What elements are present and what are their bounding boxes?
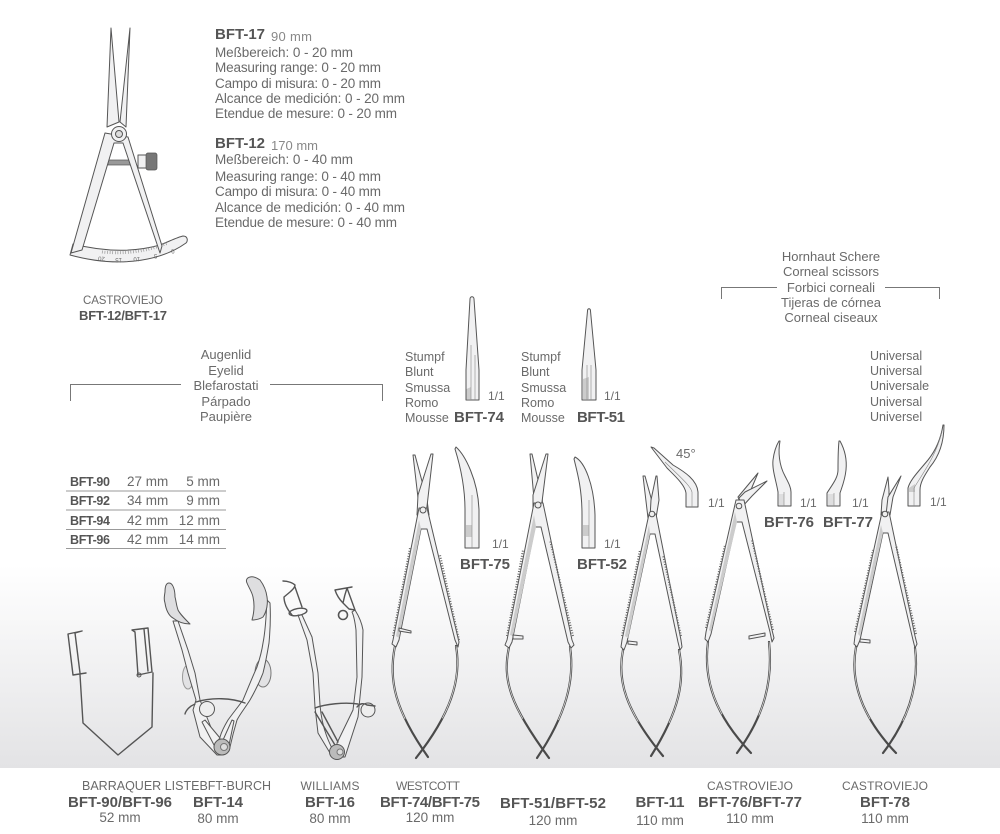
- icon: caliper BFT-12/BFT-17: 10: [133, 255, 140, 262]
- icon: caliper BFT-12/BFT-17: 15: [115, 256, 122, 262]
- text block: blunt BFT-74: BFT-74: [454, 409, 505, 426]
- icon: caliper BFT-12/BFT-17: 0: [170, 247, 175, 254]
- label: Castroviejo BFT-78: BFT-78: [860, 794, 910, 811]
- text block: blunt BFT-51: Smussa: [521, 381, 566, 395]
- icon: caliper BFT-12/BFT-17: 5: [153, 252, 158, 259]
- icon: curved tip BFT-52: 1/1: [604, 537, 621, 551]
- label: Castroviejo BFT-76/BFT-77: BFT-76/BFT-77: [698, 794, 802, 811]
- table: BFT-90 to BFT-96 sizes: 12 mm: [179, 513, 220, 528]
- table: BFT-90 to BFT-96 sizes: 14 mm: [179, 532, 220, 547]
- icon: curved tip BFT-52: [574, 457, 627, 573]
- text block: blunt BFT-74: Stumpf: [405, 350, 445, 364]
- label: Westcott: [380, 779, 480, 825]
- text block: universal: Universal: [870, 395, 922, 409]
- heading: eyelid specula: Blefarostati: [193, 378, 259, 393]
- icon: curved tip BFT-75: [455, 447, 510, 573]
- label: Castroviejo caliper: [79, 295, 167, 323]
- icon: Westcott scissors BFT-74/BFT-75: [392, 454, 459, 758]
- icon: tip BFT-77: [823, 441, 873, 531]
- icon: scissors BFT-11: [621, 476, 682, 756]
- heading: eyelid specula: [70, 347, 382, 424]
- icon: curved tip BFT-75: BFT-75: [460, 556, 510, 573]
- text block: universal: Universale: [870, 379, 929, 393]
- text block: BFT-17 specs: Alcance de medición: 0 - 20 mm: [215, 91, 405, 106]
- heading: corneal scissors: Hornhaut Schere: [782, 249, 880, 264]
- label: Castroviejo BFT-78: CASTROVIEJO: [842, 779, 928, 793]
- text block: universal: [870, 349, 929, 424]
- icon: tip BFT-76: BFT-76: [764, 514, 814, 531]
- text block: blunt BFT-74: Mousse: [405, 411, 449, 425]
- icon: universal tip: 1/1: [930, 495, 947, 509]
- text block: BFT-17 specs: 90 mm: [271, 29, 312, 44]
- heading: eyelid specula: Augenlid: [201, 347, 251, 362]
- label: BFT-11: BFT-11: [636, 794, 684, 811]
- text block: blunt BFT-74: 1/1: [488, 389, 505, 403]
- label: Westcott: WESTCOTT: [396, 779, 461, 793]
- icon: 45 degree tip BFT-11: 1/1: [708, 496, 725, 510]
- icon: curved tip BFT-75: 1/1: [492, 537, 509, 551]
- table: BFT-90 to BFT-96 sizes: 34 mm: [127, 493, 168, 508]
- icon: curved tip BFT-52: BFT-52: [577, 556, 627, 573]
- text block: BFT-12 specs: [215, 135, 405, 230]
- label: Westcott: 120 mm: [406, 810, 454, 825]
- label: Williams: WILLIAMS: [300, 779, 360, 793]
- table: BFT-90 to BFT-96 sizes: BFT-96: [70, 533, 110, 547]
- label: BFT-51/BFT-52: [500, 795, 606, 828]
- label: Barraquer / Lister-Burch: 80 mm: [197, 811, 239, 826]
- text block: universal: Universal: [870, 349, 922, 363]
- icon: tip BFT-77: BFT-77: [823, 514, 873, 531]
- text block: blunt BFT-51: Stumpf: [521, 350, 561, 364]
- icon: scissors BFT-76/BFT-77: [705, 473, 774, 753]
- label: Castroviejo BFT-76/BFT-77: [698, 779, 802, 826]
- heading: eyelid specula: Párpado: [201, 394, 251, 409]
- icon: tip BFT-76: [764, 441, 817, 531]
- text block: blunt BFT-51: BFT-51: [577, 409, 625, 426]
- text block: universal: Universal: [870, 364, 922, 378]
- text block: blunt BFT-51: 1/1: [604, 389, 621, 403]
- icon: scissors BFT-78: [854, 476, 917, 753]
- table: BFT-90 to BFT-96 sizes: 42 mm: [127, 513, 168, 528]
- icon: scissors BFT-51/BFT-52: [505, 454, 574, 758]
- icon: Barraquer speculum: [68, 628, 153, 755]
- table: BFT-90 to BFT-96 sizes: BFT-92: [70, 494, 110, 508]
- text block: blunt BFT-51: Mousse: [521, 411, 565, 425]
- table: BFT-90 to BFT-96 sizes: [66, 474, 226, 548]
- label: Barraquer / Lister-Burch: BFT-90/BFT-96: [68, 794, 172, 811]
- label: Barraquer / Lister-Burch: BARRAQUER LISTEBFT-BURCH: [82, 779, 271, 793]
- text block: BFT-17 specs: BFT-17: [215, 26, 265, 43]
- text block: BFT-17 specs: [215, 26, 405, 121]
- text block: blunt BFT-51: Blunt: [521, 365, 550, 379]
- text block: universal: Universel: [870, 410, 922, 424]
- label: Castroviejo BFT-78: [842, 779, 928, 826]
- text block: BFT-12 specs: BFT-12: [215, 135, 265, 152]
- label: Westcott: BFT-74/BFT-75: [380, 794, 480, 811]
- heading: corneal scissors: Tijeras de córnea: [781, 295, 882, 310]
- table: BFT-90 to BFT-96 sizes: 5 mm: [186, 474, 220, 489]
- text block: blunt BFT-74: Romo: [405, 396, 438, 410]
- icon: caliper BFT-12/BFT-17: 20: [97, 254, 105, 261]
- text block: blunt BFT-74: [405, 350, 505, 426]
- label: Castroviejo caliper: CASTROVIEJO: [83, 295, 163, 307]
- text block: BFT-12 specs: Meßbereich: 0 - 40 mm: [215, 152, 353, 167]
- table: BFT-90 to BFT-96 sizes: 27 mm: [127, 474, 168, 489]
- table: BFT-90 to BFT-96 sizes: 42 mm: [127, 532, 168, 547]
- heading: eyelid specula: Paupière: [200, 409, 252, 424]
- heading: corneal scissors: Corneal ciseaux: [784, 310, 878, 325]
- label: Castroviejo BFT-76/BFT-77: CASTROVIEJO: [707, 779, 793, 793]
- text block: BFT-17 specs: Etendue de mesure: 0 - 20 mm: [215, 106, 397, 121]
- text block: BFT-12 specs: Campo di misura: 0 - 40 mm: [215, 184, 381, 199]
- icon: 45 degree tip BFT-11: 45°: [676, 446, 696, 461]
- text block: blunt BFT-51: Romo: [521, 396, 554, 410]
- label: BFT-11: 110 mm: [636, 813, 684, 828]
- label: Barraquer / Lister-Burch: BFT-14: [193, 794, 244, 811]
- icon: tip BFT-77: 1/1: [852, 496, 869, 510]
- text block: blunt BFT-74: Blunt: [405, 365, 434, 379]
- icon: tip BFT-76: 1/1: [800, 496, 817, 510]
- label: BFT-11: [636, 794, 684, 828]
- heading: eyelid specula: Eyelid: [208, 363, 244, 378]
- label: BFT-51/BFT-52: 120 mm: [529, 813, 577, 828]
- text block: BFT-12 specs: Alcance de medición: 0 - 40 mm: [215, 200, 405, 215]
- text block: BFT-17 specs: Meßbereich: 0 - 20 mm: [215, 45, 353, 60]
- text block: BFT-12 specs: Etendue de mesure: 0 - 40 mm: [215, 215, 397, 230]
- text block: blunt BFT-51: [521, 350, 625, 426]
- label: Williams: [300, 779, 360, 826]
- icon: 45 degree tip BFT-11: [651, 446, 725, 510]
- text block: BFT-17 specs: Measuring range: 0 - 20 mm: [215, 60, 381, 75]
- icon: Williams speculum: [283, 581, 375, 760]
- icon: blade tip BFT-74: [466, 297, 479, 400]
- table: BFT-90 to BFT-96 sizes: BFT-94: [70, 514, 110, 528]
- label: Barraquer / Lister-Burch: [68, 779, 271, 826]
- label: Castroviejo BFT-78: 110 mm: [861, 811, 909, 826]
- icon: Lister-Burch speculum: [164, 577, 271, 755]
- label: BFT-51/BFT-52: BFT-51/BFT-52: [500, 795, 606, 812]
- icon: caliper BFT-12/BFT-17: [70, 28, 187, 262]
- label: Williams: BFT-16: [305, 794, 355, 811]
- icon: blade tip BFT-51: [582, 309, 596, 400]
- heading: corneal scissors: [722, 249, 940, 325]
- icon: universal tip: [908, 425, 947, 509]
- heading: corneal scissors: Forbici corneali: [787, 280, 875, 295]
- label: Williams: 80 mm: [309, 811, 351, 826]
- text block: BFT-12 specs: 170 mm: [271, 138, 318, 153]
- table: BFT-90 to BFT-96 sizes: 9 mm: [186, 493, 220, 508]
- label: Castroviejo caliper: BFT-12/BFT-17: [79, 308, 167, 323]
- label: Barraquer / Lister-Burch: 52 mm: [99, 810, 141, 825]
- text block: blunt BFT-74: Smussa: [405, 381, 450, 395]
- text block: BFT-12 specs: Measuring range: 0 - 40 mm: [215, 169, 381, 184]
- label: Castroviejo BFT-76/BFT-77: 110 mm: [726, 811, 774, 826]
- table: BFT-90 to BFT-96 sizes: BFT-90: [70, 475, 110, 489]
- text block: BFT-17 specs: Campo di misura: 0 - 20 mm: [215, 76, 381, 91]
- heading: corneal scissors: Corneal scissors: [783, 264, 880, 279]
